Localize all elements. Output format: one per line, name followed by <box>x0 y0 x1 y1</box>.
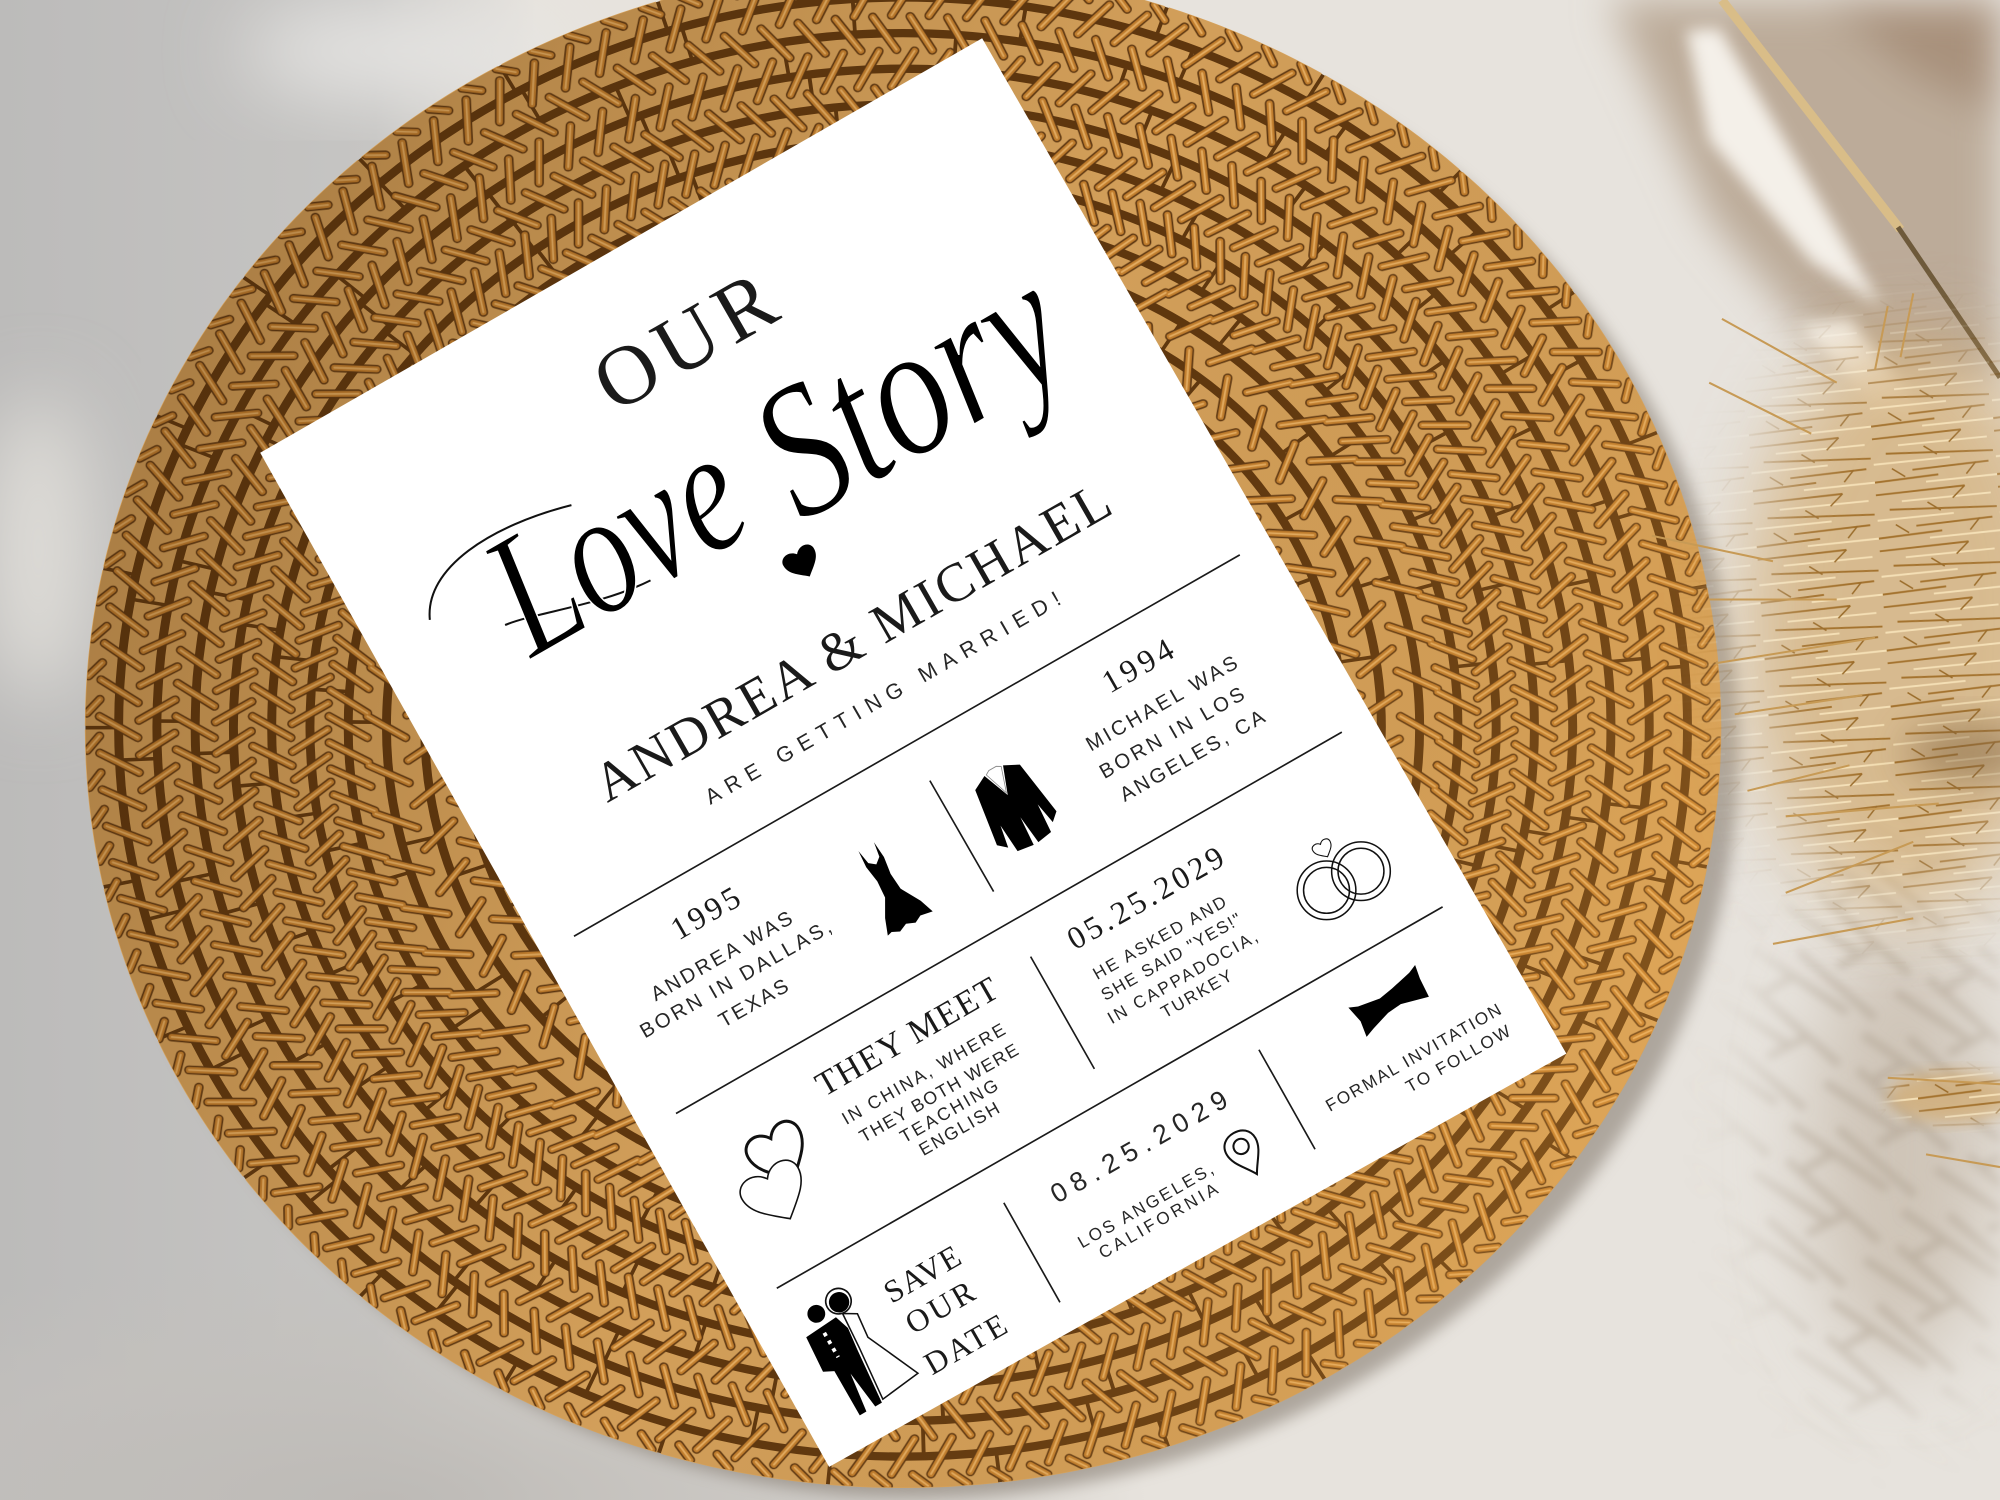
block: 1994 Michael: BORN IN LOS <box>1096 683 1248 784</box>
dried pampas grass <box>1652 0 2000 1168</box>
block: save our date <box>878 1238 1013 1382</box>
block: They meet: THEY MEET <box>809 970 1005 1104</box>
card sheet <box>260 38 1566 1467</box>
block: wedding date and place: CALIFORNIA <box>1095 1178 1222 1263</box>
block: They meet: IN CHINA, WHERE <box>838 1019 1009 1129</box>
block: save our date: SAVE <box>878 1238 967 1310</box>
icon: bow tie <box>1346 965 1434 1038</box>
block: proposal date: 05.25.2029 <box>1061 839 1230 957</box>
block: save our date: DATE <box>918 1307 1013 1382</box>
block: 1994 Michael: ANGELES, CA <box>1116 706 1269 806</box>
block: They meet <box>809 970 1022 1160</box>
block: 1994 Michael: MICHAEL WAS <box>1082 652 1242 756</box>
subtitle: ARE GETTING MARRIED! <box>700 586 1065 809</box>
icon: wedding rings <box>1297 837 1390 920</box>
block: They meet: THEY BOTH WERE <box>856 1040 1022 1146</box>
block: 1994 Michael <box>1082 632 1269 806</box>
block: proposal date: TURKEY <box>1157 965 1236 1022</box>
block: proposal date: HE ASKED AND <box>1089 891 1230 984</box>
block: formal invitation: TO FOLLOW <box>1402 1020 1514 1097</box>
title: Our Love Story <box>430 218 1099 694</box>
block: proposal date <box>1061 839 1261 1028</box>
script word: Story: Story <box>717 218 1099 560</box>
icon: bride and groom <box>790 1274 922 1420</box>
block: 1995 Andrea: ANDREA WAS <box>647 907 797 1006</box>
icon: dress <box>844 834 933 938</box>
block: 1995 Andrea: TEXAS <box>715 975 792 1032</box>
block: wedding date and place: LOS ANGELES, <box>1074 1159 1217 1252</box>
invitation card <box>260 38 1566 1467</box>
icon: tuxedo jacket <box>963 751 1065 861</box>
block: 1994 Michael: 1994 <box>1096 632 1180 700</box>
block: proposal date: SHE SAID "YES!" <box>1097 909 1245 1005</box>
icon: two outlined hearts <box>718 1116 835 1235</box>
icon: location pin <box>1219 1125 1271 1182</box>
block: save our date: OUR <box>899 1273 981 1341</box>
block: They meet: ENGLISH <box>915 1098 1003 1160</box>
block: 1995 Andrea: BORN IN DALLAS, <box>636 916 836 1043</box>
block: wedding date and place: 08.25.2029 <box>1045 1084 1233 1209</box>
block: proposal date: IN CAPPADOCIA, <box>1104 926 1261 1028</box>
couple names: ANDREA & MICHAEL <box>583 470 1121 814</box>
heading word: OUR: OUR <box>578 253 793 430</box>
script word: Love: Love <box>450 391 777 694</box>
script swash: love flourish <box>430 505 651 625</box>
icon: heart <box>780 542 825 585</box>
row dividers <box>574 555 1443 1302</box>
block: They meet: TEACHING <box>896 1075 1002 1147</box>
block: 1995 Andrea: 1995 <box>665 880 746 947</box>
block: formal invitation: FORMAL INVITATION <box>1322 999 1505 1116</box>
